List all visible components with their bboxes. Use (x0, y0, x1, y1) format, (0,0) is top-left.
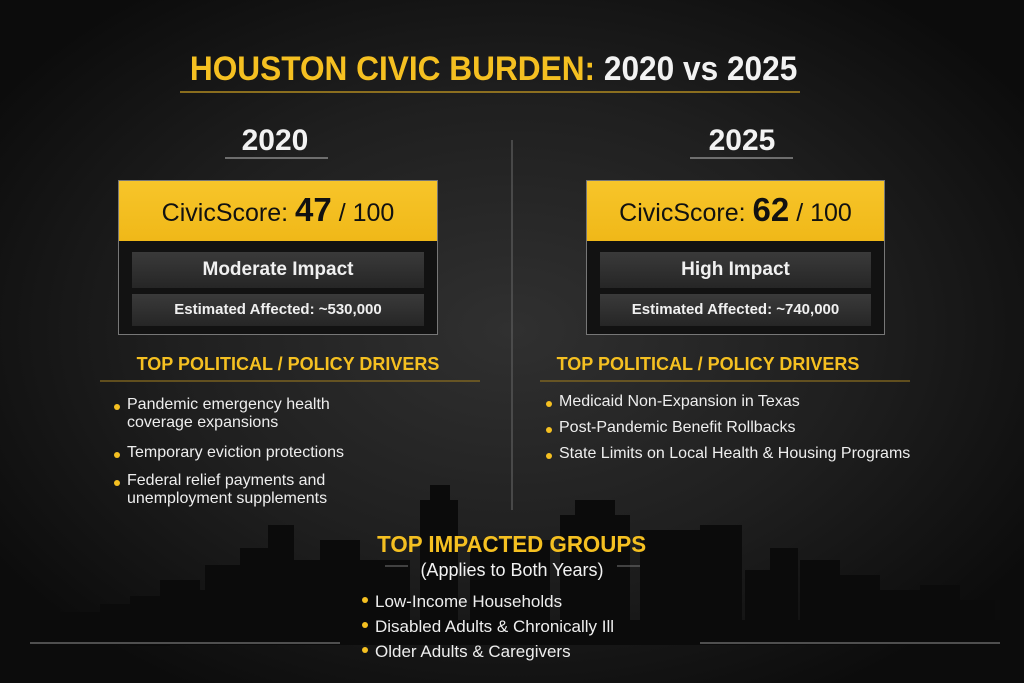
score 2020: CivicScore: 47 / 100 (162, 191, 394, 228)
affected 2020: Estimated Affected: ~530,000 (174, 301, 382, 318)
drivers heading left: TOP POLITICAL / POLICY DRIVERS (137, 354, 439, 374)
score 2025: CivicScore: 62 / 100 (619, 191, 852, 228)
drivers list 2025: Post-Pandemic Benefit Rollbacks (559, 419, 796, 436)
title: HOUSTON CIVIC BURDEN: 2020 vs 2025 (190, 50, 798, 88)
card: 2020 (118, 180, 438, 335)
drivers list 2020: unemployment supplements (127, 490, 327, 507)
drivers list 2020: Temporary eviction protections (127, 444, 344, 461)
affected 2020 (132, 294, 424, 326)
groups list: Disabled Adults & Chronically Ill (375, 617, 614, 636)
drivers list 2025: State Limits on Local Health & Housing Programs (559, 445, 910, 462)
impact 2025 (600, 252, 871, 288)
groups subtitle: (Applies to Both Years) (420, 560, 604, 580)
groups list: Low-Income Households (375, 592, 562, 611)
drivers list 2020 (114, 396, 344, 507)
drivers list 2025 (546, 393, 910, 462)
score 2025 (587, 181, 884, 241)
drivers list 2025: Medicaid Non-Expansion in Texas (559, 393, 800, 410)
score 2020 (119, 181, 437, 241)
heading: 2020: 2020 (242, 124, 308, 157)
card: 2025 (586, 180, 885, 335)
groups list (362, 592, 614, 661)
impact 2020: Moderate Impact (202, 259, 353, 280)
groups list: Older Adults & Caregivers (375, 642, 571, 661)
groups heading: TOP IMPACTED GROUPS (377, 531, 646, 557)
affected 2025: Estimated Affected: ~740,000 (632, 301, 839, 318)
impact 2025: High Impact (681, 259, 790, 280)
affected 2025 (600, 294, 871, 326)
drivers list 2020: Pandemic emergency health (127, 396, 330, 413)
drivers heading right: TOP POLITICAL / POLICY DRIVERS (557, 354, 859, 374)
drivers list 2020: Federal relief payments and (127, 472, 325, 489)
heading: 2025: 2025 (709, 124, 775, 157)
drivers list 2020: coverage expansions (127, 414, 278, 431)
impact 2020 (132, 252, 424, 288)
